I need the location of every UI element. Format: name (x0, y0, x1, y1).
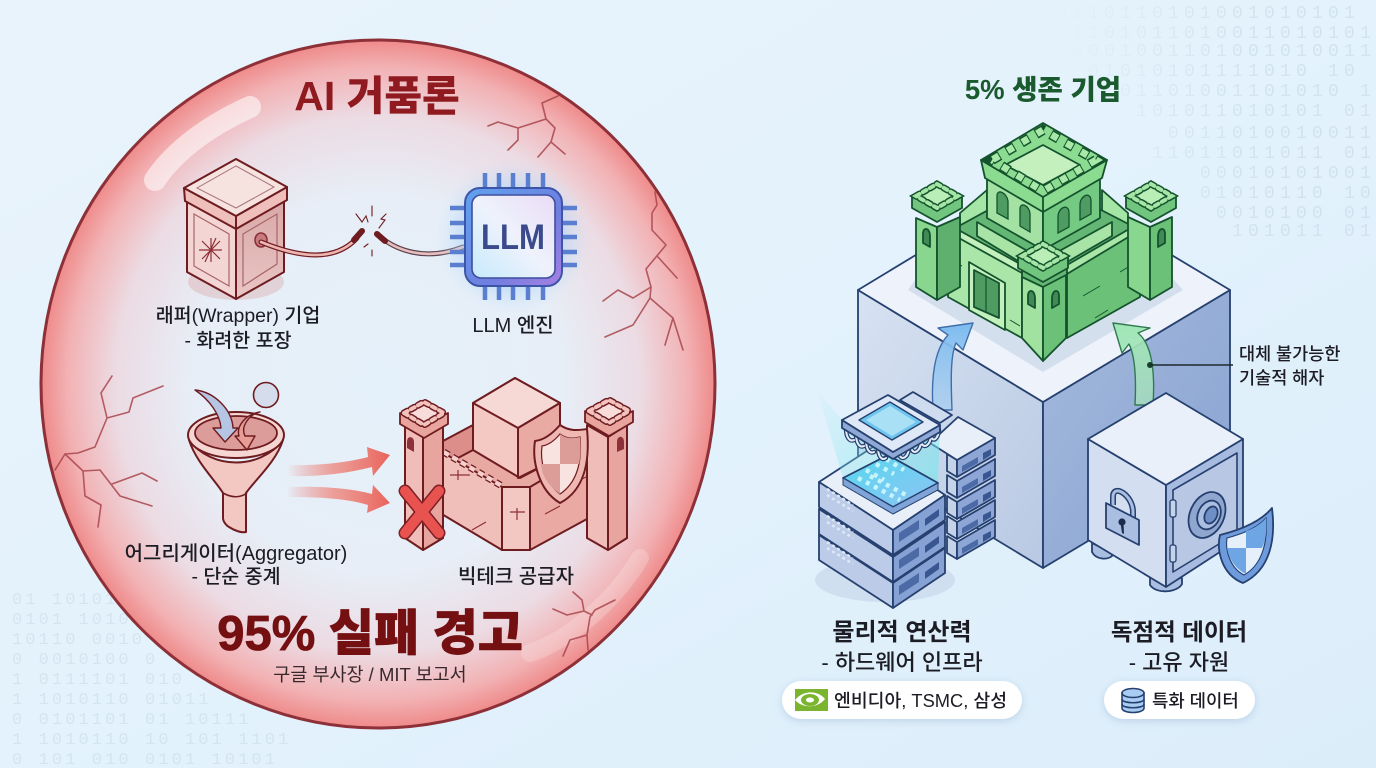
pill: nvidia (782, 681, 1022, 719)
icon: wrapper box (184, 159, 287, 300)
source line: 구글 부사장 / MIT 보고서 (273, 664, 467, 685)
front servers (819, 447, 945, 608)
binary pattern: top right: 0011010010011 (1168, 124, 1376, 144)
icon: aggregator funnel (188, 382, 284, 532)
bubble highlights (155, 107, 640, 653)
icon: database (1122, 688, 1144, 712)
icon: red X (405, 491, 439, 533)
label: proprietary data: 독점적 데이터 (1111, 619, 1247, 645)
binary pattern: top right: 1101011010011010101 (1072, 24, 1376, 44)
icon: LLM chip (435, 159, 591, 315)
pill: data (1104, 681, 1255, 719)
icon: GPU server stack (815, 390, 995, 608)
binary pattern: top right: 0001001101001010011 (1072, 42, 1376, 62)
label: LLM engine: LLM 엔진 (472, 314, 554, 337)
label: computing power (782, 619, 1022, 719)
glowing plate (843, 455, 938, 514)
icon: big tech castle (400, 378, 633, 550)
central keep (977, 123, 1112, 276)
label: wrapper (156, 305, 320, 352)
binary pattern: bottom left: 01 10101 (12, 591, 118, 610)
label: aggregator (125, 542, 347, 588)
padlock (1106, 491, 1139, 545)
pill: data: 특화 데이터 (1152, 691, 1239, 711)
binary pattern: top right: 0010100 01 (1216, 204, 1376, 224)
headline: 95% failure warning: 95% 실패 경고 (217, 607, 523, 661)
binary pattern: bottom left (12, 591, 291, 768)
corner towers (912, 182, 1176, 361)
bubble sphere (41, 40, 715, 728)
binary pattern: top right: 00010101001 (1200, 164, 1376, 184)
binary pattern: top right: 01010101111010 10 (1088, 62, 1360, 82)
icon: vault safe (1088, 393, 1273, 591)
icon: broken cable (261, 206, 463, 256)
label: aggregator: 어그리게이터(Aggregator) (125, 542, 347, 565)
binary pattern: bottom left: 0 0010100 0 (12, 651, 158, 670)
label: computing power: 물리적 연산력 (832, 619, 972, 646)
panel: AI bubble (41, 40, 715, 728)
back server rack (900, 392, 995, 559)
binary pattern: bottom left: 0101 1010 (12, 611, 132, 630)
callout: moat: 대체 불가능한 (1239, 344, 1340, 364)
callout: moat: 기술적 해자 (1239, 368, 1324, 388)
arrows: funnel to big tech (287, 447, 390, 513)
front walls (925, 225, 1140, 338)
shield (1219, 508, 1273, 583)
label: wrapper: 래퍼(Wrapper) 기업 (156, 305, 320, 327)
arrow: blue up to castle (932, 323, 973, 410)
pill: nvidia: 엔비디아, TSMC, 삼성 (834, 690, 1007, 711)
label: proprietary data (1104, 619, 1255, 719)
label: aggregator: - 단순 중계 (191, 566, 281, 588)
pedestal block (858, 178, 1230, 568)
binary pattern: bottom left: 0 0101101 01 10111 (12, 711, 251, 730)
label: proprietary data: - 고유 자원 (1129, 650, 1229, 675)
binary pattern: bottom left: 10110 0010 (12, 631, 145, 650)
icon: green castle (912, 123, 1176, 361)
binary pattern: bottom left: 1 1010110 10 101 1101 (12, 731, 291, 750)
title: AI 거품론 (294, 73, 460, 119)
binary pattern: top right: 11011011011 01 (1152, 144, 1376, 164)
light beam (817, 390, 940, 507)
binary pattern: bottom left: 1 0111101 010 (12, 671, 185, 690)
icon: LLM chip: LLM (481, 218, 545, 257)
label: wrapper: - 화려한 포장 (184, 330, 292, 352)
binary pattern: top right: 101011010101 01 (1136, 102, 1376, 122)
label: computing power: - 하드웨어 인프라 (821, 650, 983, 675)
binary pattern: top right: 101011 01 (1232, 222, 1376, 242)
icon: nvidia eye (795, 689, 828, 711)
panel: 5% survivors (782, 74, 1340, 719)
arrow: green up to castle (1113, 323, 1154, 405)
label: big tech: 빅테크 공급자 (458, 565, 574, 588)
AI chip (842, 395, 940, 459)
binary pattern: bottom left: 1 1010110 01011 (12, 691, 212, 710)
binary pattern: top right (1040, 4, 1376, 242)
binary pattern: top right: 10110110101001010101 (1040, 4, 1360, 24)
cracks (55, 96, 683, 656)
callout: moat (1147, 344, 1340, 388)
binary pattern: top right: 01101001101010 1 (1120, 82, 1376, 102)
heading: 5% 생존 기업 (965, 74, 1121, 105)
binary pattern: top right: 01010110 10 (1200, 184, 1376, 204)
